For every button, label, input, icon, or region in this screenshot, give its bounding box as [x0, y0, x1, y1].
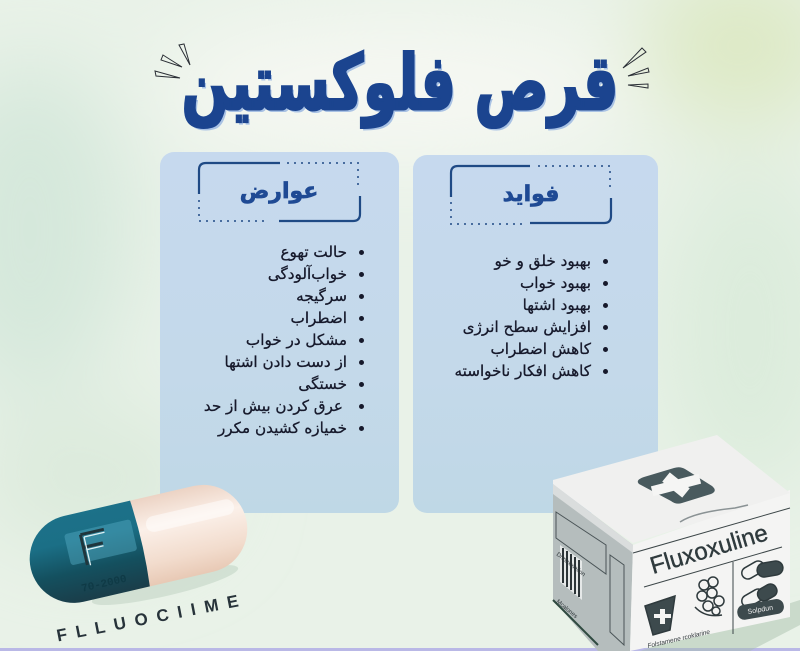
icon: capsule: [30, 484, 249, 645]
side effects list: سرگیجه: [296, 287, 347, 305]
box left face: Drmaxxiation: [555, 552, 586, 578]
box right face: [630, 490, 790, 651]
side effects list: خمیازه کشیدن مکرر: [218, 419, 347, 437]
benefits heading frame: [450, 164, 612, 225]
side effects list: خستگی: [298, 375, 347, 393]
side effects list: حالت تهوع: [280, 243, 347, 261]
box left face: Mcalones: [555, 599, 578, 620]
side effects list: از دست دادن اشتها: [224, 353, 347, 371]
side effects list: خواب‌آلودگی: [268, 265, 347, 283]
benefits list: کاهش افکار ناخواسته: [455, 362, 591, 380]
icon: medicine box: [552, 435, 800, 651]
box illustrations: [645, 559, 784, 635]
side effects list: اضطراب: [291, 309, 347, 327]
side effects list: عرق کردن بیش از حد: [204, 397, 343, 415]
box left face: [553, 484, 633, 651]
box brand name: Fluxoxuline: [647, 519, 771, 580]
capsule label: FLLUOCIIME: [55, 590, 249, 645]
benefits heading: فواید: [503, 182, 559, 207]
box lid: [553, 435, 790, 543]
icon: medicine box: Folstamene rcoklarine: [647, 629, 711, 650]
benefits list: بهبود خواب: [520, 274, 591, 292]
title: قرص فلوکستین: [182, 38, 618, 127]
benefits list: افزایش سطح انرژی: [463, 318, 591, 336]
benefits list: بهبود اشتها: [523, 296, 591, 314]
benefits list: [455, 252, 608, 380]
lid cross badge: [638, 467, 715, 504]
side effects list: [204, 243, 364, 437]
panel: benefits: [413, 155, 658, 513]
icon: capsule: 70-2000: [80, 574, 128, 596]
side effects list: مشکل در خواب: [246, 331, 347, 349]
benefits list: کاهش اضطراب: [490, 340, 591, 358]
benefits list: بهبود خلق و خو: [494, 252, 591, 270]
icon: right title sparks: [622, 47, 650, 89]
icon: medicine box: Solpdun: [747, 605, 774, 616]
panel: side effects: [160, 152, 399, 513]
icon: left title sparks: [154, 43, 190, 78]
side effects heading: عوارض: [240, 179, 318, 204]
side effects heading frame: [198, 162, 362, 222]
